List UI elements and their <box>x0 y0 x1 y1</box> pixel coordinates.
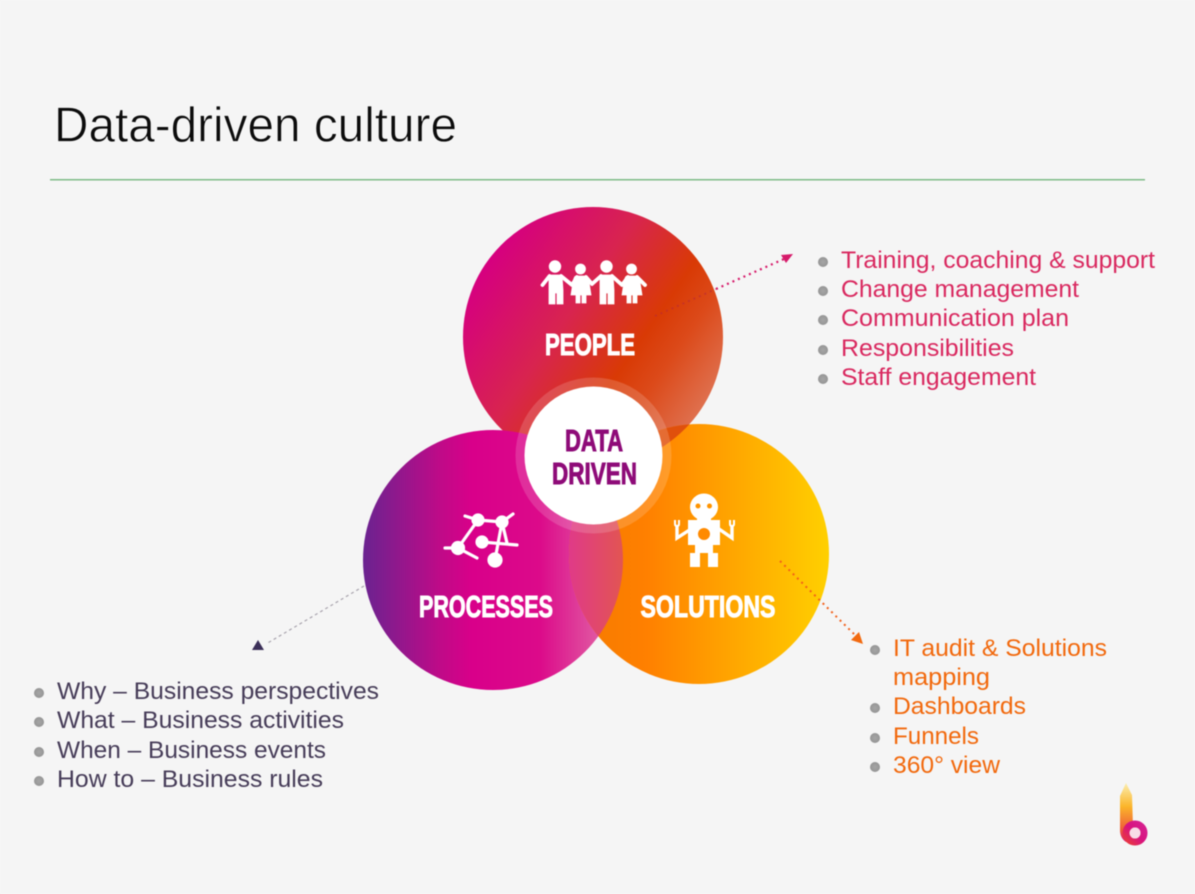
circle: solutions <box>569 424 829 684</box>
title: Data-driven culture <box>54 98 457 152</box>
icon: logo <box>1120 783 1144 842</box>
icon: people holding hands <box>542 261 645 304</box>
list: solutions: Funnels <box>893 723 979 750</box>
list: processes: When – Business events <box>57 737 326 764</box>
list: people: Communication plan <box>841 305 1069 332</box>
arrow: people to list <box>655 254 793 316</box>
circle: processes <box>363 430 623 690</box>
list: processes: How to – Business rules <box>57 766 323 793</box>
center circle: data driven <box>524 386 662 524</box>
label: processes: PROCESSES <box>419 589 553 624</box>
circle: people <box>463 207 723 467</box>
list: processes <box>34 678 379 793</box>
icon: process network <box>445 514 517 566</box>
list: people: Training, coaching & support <box>841 247 1155 274</box>
list: people: Staff engagement <box>841 364 1036 391</box>
list: solutions: IT audit & Solutions <box>893 635 1107 662</box>
list: people: Responsibilities <box>841 335 1014 362</box>
center circle: data driven: DRIVEN <box>552 456 637 491</box>
overlap: people and solutions <box>658 424 690 447</box>
icon: robot <box>675 494 734 567</box>
label: people: PEOPLE <box>545 327 635 362</box>
list: solutions: Dashboards <box>893 693 1026 720</box>
overlap: processes and solutions <box>568 520 624 636</box>
venn diagram <box>363 207 829 690</box>
list: people <box>818 247 1155 391</box>
arrow: processes to list <box>252 586 364 650</box>
list: processes: What – Business activities <box>57 707 344 734</box>
center circle: data driven: DATA <box>565 423 623 458</box>
arrow: solutions to list <box>780 561 863 644</box>
list: processes: Why – Business perspectives <box>57 678 379 705</box>
list: solutions <box>870 635 1107 779</box>
label: solutions: SOLUTIONS <box>640 589 776 624</box>
list: solutions: 360° view <box>893 752 1000 779</box>
center halo <box>516 378 672 534</box>
list: solutions: mapping <box>893 664 990 691</box>
list: people: Change management <box>841 276 1079 303</box>
